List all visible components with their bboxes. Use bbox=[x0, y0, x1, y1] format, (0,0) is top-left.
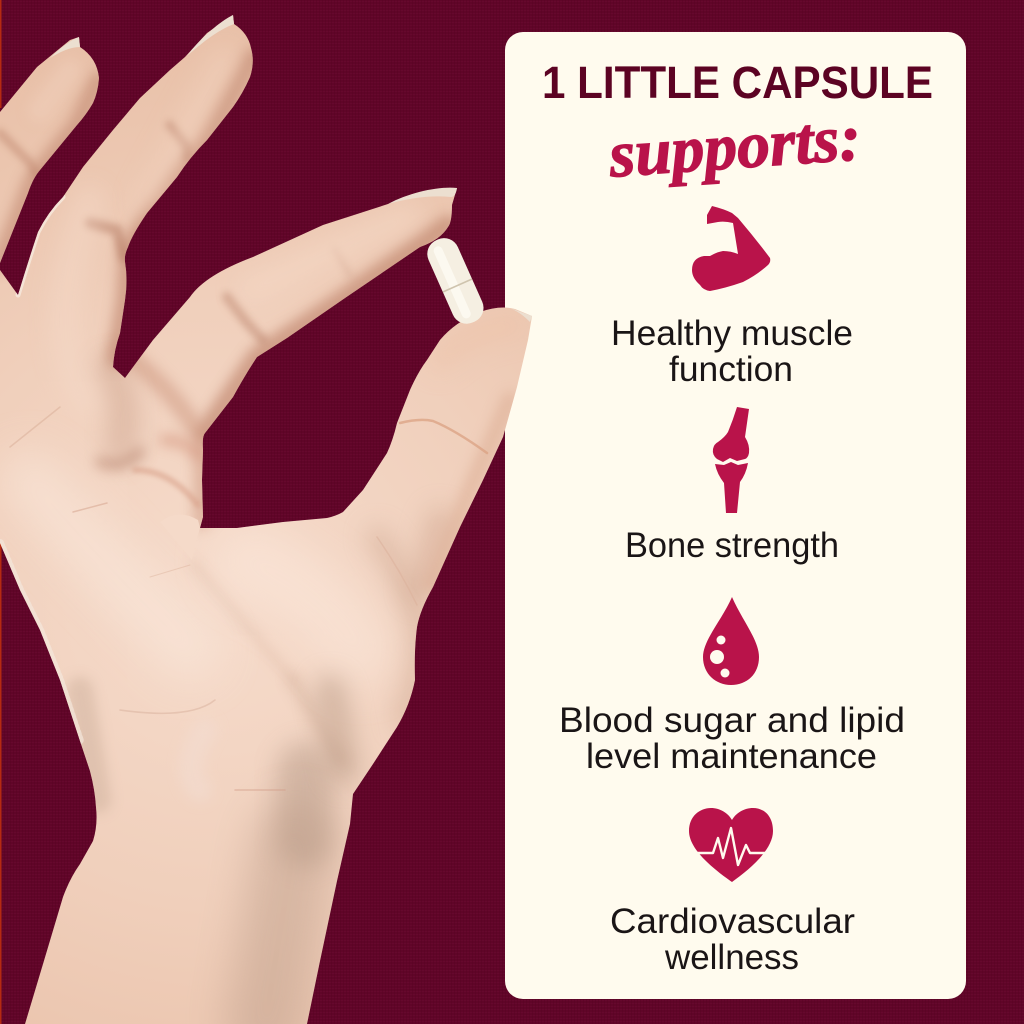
thumb fold bbox=[160, 514, 200, 560]
label: cardiovascular wellness: wellness bbox=[664, 938, 799, 977]
icon: blood drop bbox=[703, 597, 759, 685]
label: blood sugar and lipid bbox=[559, 701, 905, 776]
script heading: supports: supports: bbox=[606, 101, 863, 192]
capsule bbox=[422, 233, 488, 329]
label: healthy muscle function bbox=[611, 314, 853, 389]
edge highlights bbox=[18, 197, 63, 295]
fingernails bbox=[50, 15, 532, 322]
label: bone strength: Bone strength bbox=[625, 526, 839, 565]
photo: hand holding capsule bbox=[0, 15, 532, 1024]
icon: knee joint bbox=[713, 407, 749, 513]
label: blood sugar and lipid: Blood sugar and lipid bbox=[559, 701, 905, 740]
panel: benefits card bbox=[505, 32, 966, 999]
label: healthy muscle function: Healthy muscle bbox=[611, 314, 853, 353]
label: healthy muscle function: function bbox=[669, 350, 793, 389]
label: blood sugar and lipid: level maintenance bbox=[586, 737, 877, 776]
label: cardiovascular wellness bbox=[610, 902, 855, 977]
hand shading bbox=[0, 57, 515, 1024]
icon: flexed muscle bbox=[692, 206, 770, 291]
label: cardiovascular wellness: Cardiovascular bbox=[610, 902, 855, 941]
icon: heart with pulse bbox=[689, 808, 773, 882]
hand silhouette bbox=[0, 15, 532, 1024]
title: 1 LITTLE CAPSULE bbox=[542, 57, 933, 108]
hand creases bbox=[10, 407, 487, 790]
